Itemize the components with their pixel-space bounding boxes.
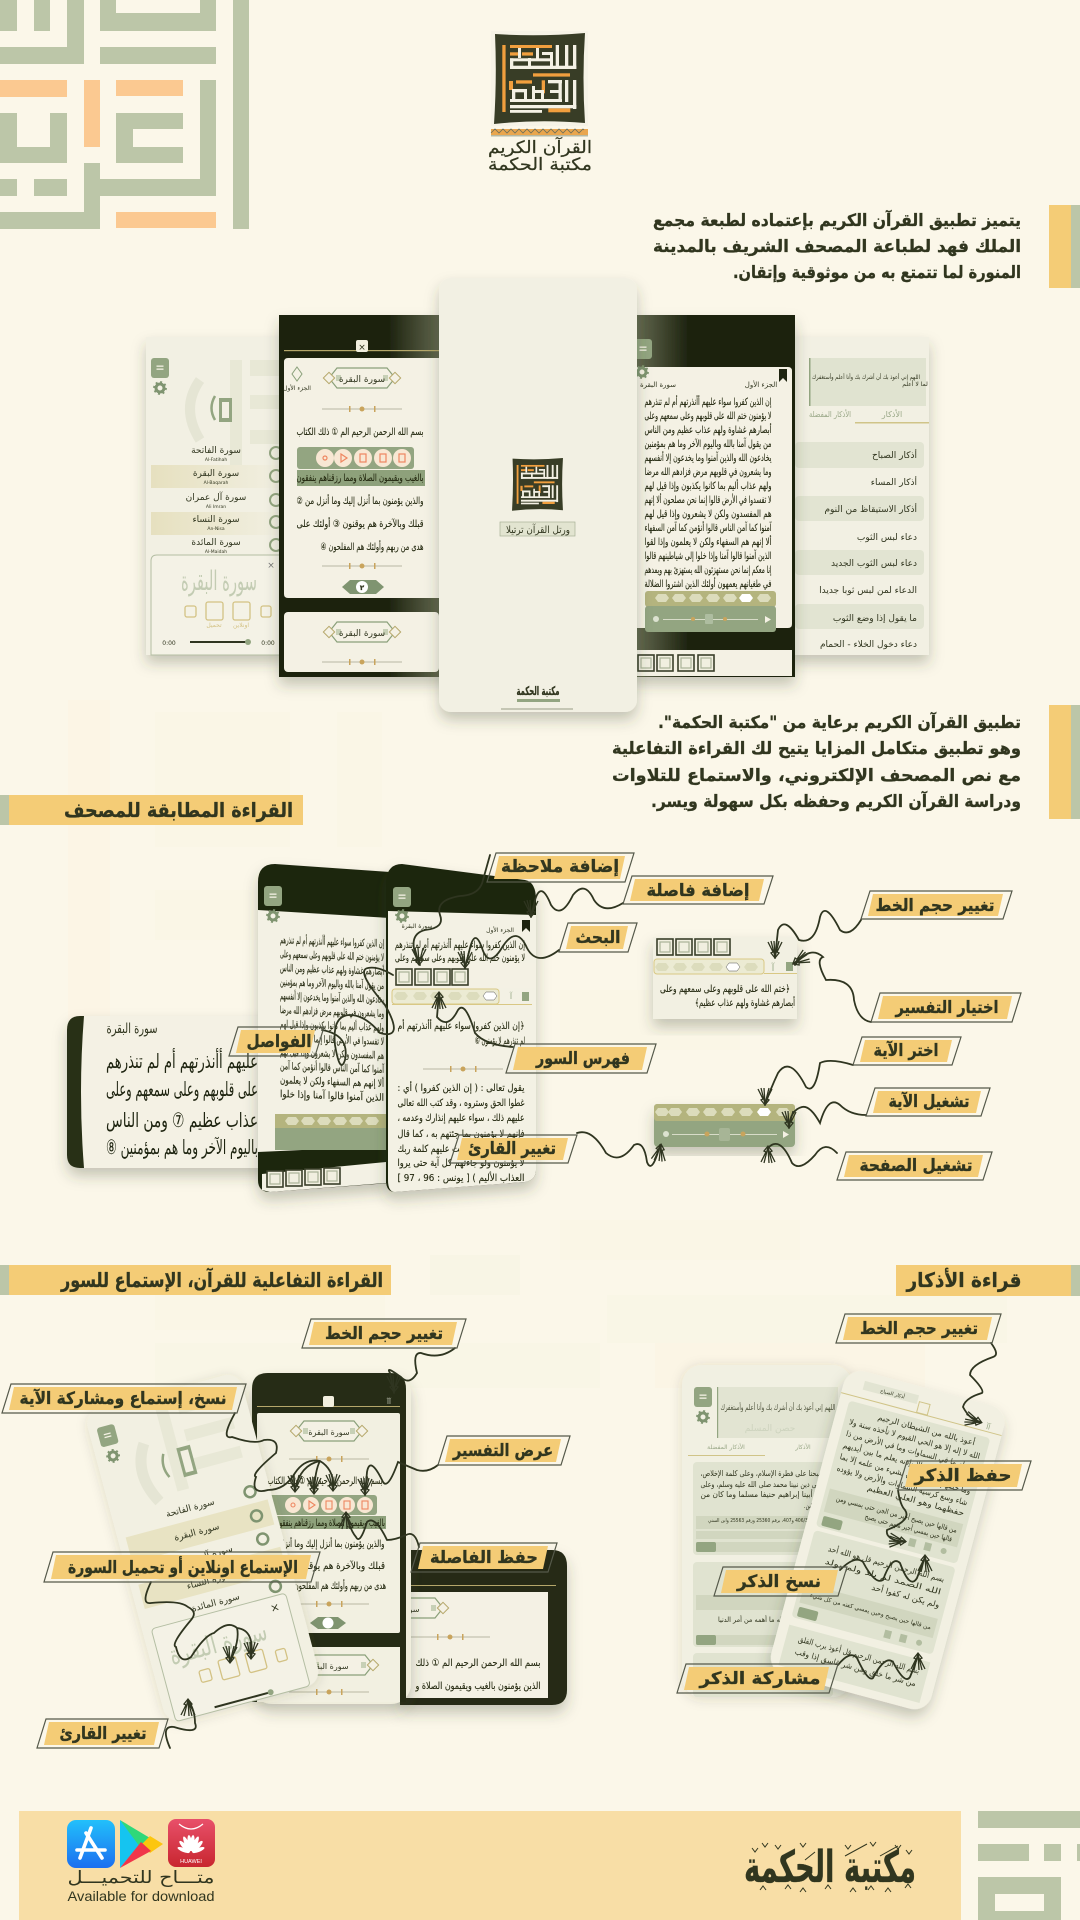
menu button [634, 339, 652, 359]
settings gear [106, 1449, 120, 1463]
card 1: نوم له ما في السماوات وما في الأرض من ذا [845, 1428, 978, 1473]
phone: dark landscape page: بسم الله الرحمن الرحيم الم ① ذلك [416, 1658, 540, 1669]
card 3: بسم الله الرحمن الرحيم قل أعوذ برب الفلق [797, 1634, 921, 1676]
intro text block 2 [612, 711, 1021, 812]
surah rows: Al-Maidah [205, 549, 227, 555]
azkar tabs: الأذكار المفضلة [809, 409, 851, 419]
tafsir lines: فإنهم لا يؤمنون بما جئتهم به ، كما قال [398, 1129, 525, 1140]
callout: save dhikr: حفظ الذكر [913, 1466, 1012, 1486]
zoomed mushaf page: عذاب عظيم ⑦ ومن الناس [106, 1108, 258, 1132]
quran lines: أبصارهم غشاوة ولهم عذاب عظيم ومن الناس [644, 423, 772, 436]
perspective quran lines: يخادعون الله والذين آمنوا وما يخدعون إلا أنفسهم [280, 989, 384, 1006]
intro text block 2: ودراسة القرآن الكريم وحفظه بكل سهولة ويسر. [651, 790, 1021, 812]
azkar rows: أذكار المساء [871, 476, 917, 488]
card 2: الله ما أهمه من أمر الدنيا [718, 1615, 786, 1624]
header: أذكار الصباح [880, 1387, 906, 1401]
surah rows: سورة آل عمران [172, 1542, 234, 1570]
phone: mushaf reading [630, 315, 795, 677]
phone: dark landscape page: سورة [401, 1605, 420, 1614]
header box: حصن المسلم [745, 1424, 795, 1434]
page number [342, 580, 384, 594]
surah frame [323, 368, 401, 388]
callout: add note: إضافة ملاحظة [501, 857, 619, 877]
callout: listen online or download [44, 1552, 320, 1582]
download caption: Available for download [68, 1888, 214, 1904]
radio icon [190, 380, 232, 440]
decorative kufic footer pattern [978, 1811, 1080, 1920]
logo: مكتبة الحكمة [488, 155, 592, 175]
juz ornament: الجزء الأول [283, 384, 311, 392]
page number: ٢ [360, 584, 365, 592]
perspective quran lines: هم المفسدون ولكن لا يشعرون وإذا قيل لهم [280, 1047, 384, 1062]
verse strip [392, 989, 532, 1005]
menu button [96, 1424, 119, 1448]
phone: mushaf with tafsir: لم تنذرهم لا يؤمنون ⑥ [475, 1036, 525, 1047]
header [841, 1376, 1006, 1436]
panel: toolbar closeup: ﴿ختم الله على قلوبهم وعلى سمعهم وعلى [660, 984, 790, 995]
page: هدى من ربهم وأولئك هم المفلحون [294, 1579, 386, 1592]
surah frame: سورة البقرة [339, 375, 385, 385]
surah rows: سورة النساء [186, 1570, 234, 1592]
arrows: azkar callouts [838, 1343, 996, 1679]
splash tagline: ورتل القرآن ترتيلا [506, 523, 570, 536]
quran lines [644, 395, 772, 590]
toolbar [390, 963, 536, 988]
page: بالغيب ويقيمون الصلاة ومما رزقناهم ينفقون [275, 1518, 385, 1529]
surah rows: Ali Imran [206, 504, 226, 510]
download caption [68, 1868, 214, 1904]
page 1 [283, 358, 439, 598]
card 1 [693, 1462, 833, 1555]
callout: surah index [506, 1044, 656, 1073]
perspective quran lines: وما يشعرون في قلوبهم مرض فزادهم الله مرضا [280, 1005, 384, 1020]
callout: play ayah: تشغيل الآية [888, 1091, 970, 1112]
arrows: section 1 callouts [322, 855, 871, 1166]
tafsir lines: عليهم ذلك ، سواء عليهم إنذارك وعدمه ، [398, 1113, 524, 1124]
intro text block 2: وهو تطبيق متكامل المزايا يتيح لك القراءة التفاعلية [612, 739, 1021, 759]
perspective quran lines: آمنوا كما آمن الناس قالوا أنؤمن كما آمن [280, 1059, 385, 1076]
zoomed mushaf page [67, 1016, 270, 1168]
perspective quran lines: ولهم عذاب أليم بما كانوا يكذبون وإذا قيل لهم [280, 1017, 384, 1034]
surah rows: Al-Fatihah [205, 457, 227, 463]
perspective quran lines: أبصارهم غشاوة ولهم عذاب عظيم ومن الناس [280, 961, 384, 978]
page: سورة البقرة [308, 1428, 350, 1437]
phone: azkar list [790, 337, 929, 655]
footer calligraphy [744, 1842, 916, 1893]
zoomed mushaf page: على قلوبهم وعلى سمعهم وعلى [106, 1077, 258, 1101]
callout: change font size (quran) [302, 1319, 466, 1348]
callout: change font size (quran): تغيير حجم الخط [325, 1324, 443, 1344]
surah rows: سورة الفاتحة [191, 446, 241, 456]
phone: dark interactive [252, 1373, 411, 1704]
callout: choose tafsir: اختيار التفسير [895, 998, 998, 1018]
strip [654, 959, 797, 974]
card 1: من قالها حين يصبح أجير من الجن حتى يمسي ومن [835, 1494, 958, 1535]
audio controls [275, 1114, 390, 1150]
surah rows: سورة البقرة [193, 469, 239, 479]
download caption: متـــاح للتحميـــل [68, 1868, 214, 1888]
card 2 [791, 1530, 956, 1655]
tafsir lines: العذاب الأليم ) [ يونس : 96 ، 97 ] [398, 1171, 524, 1184]
azkar rows: أذكار الاستيقاظ من النوم [824, 503, 917, 515]
icon: huawei [168, 1819, 215, 1867]
audio player card: تحميل [206, 622, 222, 629]
card 2: من قالها حين يصبح وحين يمسي كفته من كل شيء [809, 1592, 932, 1631]
callout: change font size (azkar) [836, 1314, 1001, 1343]
callout: bookmarks [229, 1027, 324, 1056]
callout: copy dhikr [714, 1567, 847, 1596]
card 1: أحمد 406/3 و407، برقم 25360 ورقم 25563 وابن السني [708, 1517, 819, 1524]
section heading: mushaf reading: القراءة المطابقة للمصحف [64, 798, 293, 822]
quran lines: إنا معكم إنما نحن مستهزئون الله يستهزئ بهم ويمدهم [644, 565, 772, 576]
callout: search [559, 923, 637, 952]
section heading: interactive reading: القراءة التفاعلية للقرآن، الإستماع للسور [60, 1267, 383, 1292]
second page: سورة البقرة [307, 1662, 349, 1671]
intro text block 2: تطبيق القرآن الكريم برعاية من "مكتبة الحكمة". [658, 711, 1021, 733]
callout: save dhikr [898, 1461, 1031, 1490]
card 1: ملة أبينا إبراهيم حنيفا مسلما وما كان من [700, 1489, 826, 1500]
card 1: وما خلفهم ولا يحيطون بشيء من علمه إلا بما [839, 1452, 972, 1497]
callout: show tafsir [438, 1436, 570, 1465]
callout: choose ayah [853, 1037, 961, 1065]
intro text block 2: مع نص المصحف الإلكتروني، والاستماع للتلاوات [612, 766, 1021, 786]
perspective quran lines [280, 933, 385, 1104]
phone: mushaf with tafsir: إن الذين كفروا سواء عليهم أأنذرتهم أم لم تنذرهم [395, 938, 525, 951]
card 3 [693, 1653, 833, 1697]
panel: audio controls closeup [654, 1104, 795, 1147]
phone: dark landscape page: الذين يؤمنون بالغيب ويقيمون الصلاة و [415, 1681, 540, 1692]
icon: huawei: HUAWEI [180, 1859, 202, 1865]
callout: play page: تشغيل الصفحة [860, 1156, 972, 1176]
player card [151, 1593, 310, 1722]
tab line and close [284, 340, 439, 353]
callout: add bookmark: إضافة فاصلة [646, 881, 750, 901]
footer calligraphy: مكتبة الحكمة [744, 1842, 916, 1893]
callout: show tafsir: عرض التفسير [452, 1441, 553, 1461]
surah list ghost logo [230, 360, 285, 470]
perspective quran lines: إن الذين كفروا سواء عليهم أأنذرتهم أم لم تنذرهم [280, 933, 384, 950]
section heading: interactive reading [0, 1265, 391, 1295]
callout: play page [837, 1152, 992, 1180]
side accent bar 2 [1049, 705, 1080, 819]
card 1: المشركين. [804, 1501, 826, 1510]
icon: google play [120, 1820, 163, 1868]
quran lines: لا تفسدوا في الأرض قالوا إنما نحن مصلحون ألا إنهم [644, 493, 772, 506]
azkar tabs [809, 409, 929, 424]
card 1: أصبحنا على فطرة الإسلام، وعلى كلمة الإخلاص، [700, 1468, 826, 1479]
page 2 [284, 612, 439, 672]
azkar rows: دعاء لبس الثوب [857, 533, 917, 543]
card 2: بسم الله الرحمن الرحيم قل هو الله أحد [827, 1543, 946, 1584]
page: بسم الله الرحمن الرحيم الم ① ذلك الكتاب [268, 1476, 382, 1487]
footer band [19, 1811, 961, 1920]
page 1: بالغيب ويقيمون الصلاة ومما رزقناهم ينفقون [296, 473, 424, 484]
page 1: قبلك وبالآخرة هم يوقنون ③ أولئك على [296, 517, 424, 530]
quran lines: الذين آمنوا قالوا آمنا وإذا خلوا إلى شياطينهم قالوا [644, 549, 772, 562]
zoomed mushaf page: سورة البقرة [106, 1021, 158, 1037]
card 1: قالها حين يمسي أجير منهم حتى يصبح [864, 1512, 953, 1544]
page 2: سورة البقرة [339, 629, 385, 639]
callout: bookmarks: الفواصل [246, 1032, 312, 1052]
arrows: section 2 callouts [146, 1348, 455, 1748]
background kufic ghost pattern [68, 700, 1007, 1388]
surah rows: سورة المائدة [191, 1592, 241, 1615]
phone: mushaf with tafsir [386, 864, 536, 1192]
surah rows [121, 1483, 291, 1626]
menu button [151, 358, 169, 378]
card 1: الذي يشفع عنده إلا بإذنه يعلم ما بين أيديهم [842, 1440, 975, 1485]
phone: tilted azkar reading [767, 1367, 1008, 1713]
quran lines: من يقول آمنا بالله وباليوم الآخر وما هم بمؤمنين [644, 437, 772, 450]
tabs [688, 1443, 811, 1456]
audio player card: سورة البقرة [181, 566, 257, 597]
page: والذين يؤمنون بما أنزل إليك وما أنزل [280, 1537, 385, 1550]
quran lines: يخادعون الله والذين آمنوا وما يخدعون إلا أنفسهم [644, 451, 772, 464]
strip: آ [771, 962, 775, 974]
quran lines: هم المفسدون ولكن لا يشعرون وإذا قيل لهم [644, 509, 772, 520]
azkar header box [809, 358, 928, 406]
quran lines: ولهم عذاب أليم بما كانوا يكذبون وإذا قيل لهم [644, 479, 772, 492]
phone: azkar favorites [682, 1365, 852, 1697]
tafsir lines: تعالى : إن الذين حقت عليهم كلمة ربك [398, 1144, 525, 1155]
callout: change reciter (quran): تغيير القارئ [60, 1724, 146, 1744]
azkar rows: دعاء لبس الثوب الجديد [831, 559, 917, 569]
callout: add note [487, 853, 634, 882]
azkar header box: اللهم إني أعوذ بك أن أشرك بك وأنا أعلم وأستغفرك [812, 373, 920, 381]
bottom toolbar [630, 650, 792, 676]
callout: listen online or download: الإستماع اونلاين أو تحميل السورة [68, 1556, 298, 1578]
surah rows: سورة المائدة [191, 538, 241, 548]
verse action menu [297, 447, 414, 469]
surah rows [151, 446, 286, 555]
callout: save bookmark: حفظ الفاصلة [430, 1548, 538, 1568]
logo [488, 31, 592, 175]
splash calligraphy: مكتبة الحكمة [516, 684, 560, 698]
perspective quran lines: ألا إنهم هم السفهاء ولكن لا يعلمون [280, 1073, 384, 1090]
tafsir lines: لا يؤمنون ولو جاءتهم كل آية حتى يروا [398, 1156, 524, 1169]
player card: سورة البقرة [166, 1617, 271, 1672]
second page [257, 1647, 400, 1702]
page 1: هدى من ربهم وأولئك هم المفلحون ④ [320, 540, 424, 553]
phone: surah list [146, 337, 286, 655]
azkar header box: لما لا أعلم [902, 380, 928, 388]
audio player card: 0:00 [261, 640, 275, 647]
ghost logo [155, 1388, 247, 1491]
azkar rows [795, 442, 924, 650]
azkar rows: أذكار الصباح [872, 449, 917, 461]
quran lines: لا يؤمنون ختم الله على قلوبهم وعلى سمعهم وعلى [644, 411, 772, 422]
phone: mushaf with tafsir: الجزء الأول [486, 926, 514, 934]
intro text block 1: المنورة لما تتمتع به من موثوقية وإتقان. [733, 263, 1021, 283]
callout: surah index: فهرس السور [535, 1049, 630, 1069]
header box [717, 1387, 838, 1438]
surah rows: سورة البقرة [173, 1522, 221, 1544]
phone: splash screen [439, 278, 637, 712]
perspective quran lines: من يقول آمنا بالله وباليوم الآخر وما هم بمؤمنين [280, 975, 384, 992]
card 3 [778, 1625, 930, 1703]
page 1: بسم الله الرحمن الرحيم الم ① ذلك الكتاب [296, 427, 424, 438]
tabs: الأذكار [794, 1443, 811, 1451]
phone: mushaf with tafsir: ﴿إن الذين كفروا سواء عليهم أأنذرتهم أم [398, 1019, 524, 1032]
player card: × [269, 1600, 281, 1615]
surah rows: An-Nisa [207, 526, 225, 532]
settings gear [154, 382, 166, 394]
callout: change reciter (quran) [37, 1719, 168, 1748]
callout: change font size: تغيير حجم الخط [876, 896, 994, 916]
card 3: من شر ما خلق ومن شر غاسق إذا وقب [794, 1647, 917, 1689]
card 1: أعوذ بالله من الشيطان الرجيم [877, 1412, 976, 1447]
perspective quran lines: الذين آمنوا قالوا آمنا وإذا خلوا [280, 1087, 384, 1104]
card 1: حفظهما وهو العلي العظيم [866, 1483, 965, 1518]
phone: interactive reading [279, 315, 449, 677]
callout: add bookmark [623, 876, 773, 904]
surah rows: سورة الفاتحة [165, 1497, 216, 1520]
header: آآ [984, 1422, 992, 1432]
page [257, 1413, 400, 1633]
page: قبلك وبالآخرة هم يوقنون ③ [285, 1560, 385, 1572]
callout: change reciter [450, 1135, 577, 1163]
tafsir lines: يقول تعالى : ( إن الذين كفروا ) أي : [398, 1081, 525, 1094]
splash logo [512, 458, 563, 511]
quran lines: في طغيانهم يعمهون أولئك الذين اشتروا الضلالة [644, 577, 772, 590]
audio player card: 0:00 [162, 640, 176, 647]
surah rows: Al-Baqarah [204, 480, 228, 486]
azkar rows: الدعاء لمن لبس ثوبا جديدا [819, 586, 917, 596]
audio player card [151, 555, 286, 655]
mushaf page: سورة البقرة [640, 381, 676, 389]
perspective quran lines: لا تفسدوا في الأرض قالوا إنما نحن مصلحون [280, 1031, 384, 1048]
callout: share dhikr [677, 1664, 838, 1693]
callout: change reciter: تغيير القارئ [468, 1139, 556, 1159]
callout: search: البحث [576, 928, 620, 948]
phone: mushaf perspective back: لا يؤمنون ختم الله على قلوبهم وعلى سمعهم وعلى [280, 949, 384, 964]
splash indicator [501, 699, 573, 710]
azkar rows: ما يقول إذا وضع الثوب [833, 614, 917, 624]
card 2 [693, 1562, 833, 1647]
callout: copy, listen, share: نسخ، إستماع ومشاركة الآية [20, 1388, 226, 1409]
phone: tilted surah list [84, 1372, 322, 1724]
radio icon [135, 1432, 202, 1504]
card 2: ولم يكن له كفوا أحد [871, 1582, 941, 1610]
tafsir lines [398, 1081, 525, 1184]
section heading: mushaf reading [0, 795, 303, 825]
audio player card: × [267, 561, 275, 571]
phone: mushaf perspective back [258, 864, 390, 1192]
bottom toolbar [262, 1162, 386, 1192]
callout: play ayah [866, 1088, 990, 1116]
callout: save bookmark [411, 1543, 557, 1572]
callout: share dhikr: مشاركة الذكر [698, 1669, 820, 1689]
tab line and close: × [358, 343, 366, 353]
azkar rows: دعاء دخول الخلاء - الحمام [820, 640, 917, 650]
intro text block 1: يتميز تطبيق القرآن الكريم بإعتماده لطبعة مجمع [653, 209, 1021, 231]
icon: app store [67, 1820, 115, 1868]
zoomed mushaf page: عليهم أأنذرتهم أم لم تنذرهم [106, 1048, 258, 1073]
logo: القرآن الكريم [488, 136, 592, 158]
audio controls [645, 591, 776, 632]
section heading: azkar: قراءة الأذكار [906, 1267, 1022, 1292]
callout: change font size [861, 891, 1012, 919]
quran lines: إن الذين كفروا سواء عليهم أأنذرتهم أم لم تنذرهم [644, 395, 772, 408]
card 1 [816, 1400, 990, 1564]
surah rows: سورة النساء [192, 515, 240, 525]
phone: mushaf with tafsir: سورة البقرة [402, 923, 432, 930]
splash tagline [500, 522, 575, 536]
section heading: azkar [896, 1265, 1080, 1296]
card 1: الله لا إله إلا هو الحي القيوم لا تأخذه سنة ولا [848, 1415, 981, 1462]
decorative kufic corner pattern [0, 0, 249, 229]
azkar tabs: الأذكار [881, 409, 902, 419]
page 1: والذين يؤمنون بما أنزل إليك وما أنزل من ② [296, 494, 424, 507]
panel: toolbar closeup: أبصارهم غشاوة ولهم عذاب عظيم﴾ [695, 996, 795, 1009]
surah rows: سورة آل عمران [186, 491, 246, 503]
mushaf page [630, 366, 792, 632]
panel: toolbar closeup [653, 937, 797, 1019]
callout: copy, listen, share [2, 1384, 246, 1413]
zoomed mushaf page: باليوم الآخر وما هم بمؤمنين ⑧ [106, 1135, 258, 1159]
card 1: شاء وسع كرسيه السماوات والأرض ولا يؤوده [836, 1463, 969, 1507]
tafsir lines: غطوا الحق وستروه ، وقد كتب الله تعالى [398, 1098, 524, 1109]
quran lines: ألا إنهم هم السفهاء ولكن لا يعلمون وإذا لقوا [644, 535, 772, 548]
quran lines: وما يشعرون في قلوبهم مرض فزادهم الله مرضا [644, 467, 772, 478]
verse highlight [297, 470, 425, 486]
tabs: الأذكار المفضلة [707, 1443, 745, 1451]
callout: change font size (azkar): تغيير حجم الخط [860, 1319, 978, 1339]
callout: copy dhikr: نسخ الذكر [736, 1572, 821, 1592]
side accent bar 1 [1049, 205, 1080, 288]
audio player card: اونلاين [233, 622, 249, 629]
phone: dark interactive: آآ [386, 1397, 392, 1406]
card 1: وعلى دين نبينا محمد صلى الله عليه وسلم، وعلى [700, 1480, 826, 1489]
header box: اللهم إني أعوذ بك أن أشرك بك وأنا أعلم وأستغفرك [720, 1402, 836, 1413]
phone: mushaf with tafsir: لا يؤمنون ختم الله على قلوبهم وعلى سمعهم وعلى [395, 953, 525, 964]
verse action menu [269, 1495, 377, 1515]
quran lines: آمنوا كما آمن الناس قالوا أنؤمن كما آمن السفهاء [644, 521, 772, 534]
intro text block 1: الملك فهد لطباعة المصحف الشريف بالمدينة [653, 237, 1021, 257]
phone: dark landscape page [371, 1550, 567, 1705]
callout: choose ayah: اختر الآية [874, 1040, 938, 1061]
intro text block 1 [653, 209, 1021, 283]
mushaf page: الجزء الأول [745, 380, 777, 389]
callout: choose tafsir [871, 993, 1021, 1022]
card 2: الله الصمد لم يلد ولم يولد [824, 1557, 942, 1597]
verse strip: آ [509, 991, 513, 1001]
juz ornament [283, 367, 311, 392]
